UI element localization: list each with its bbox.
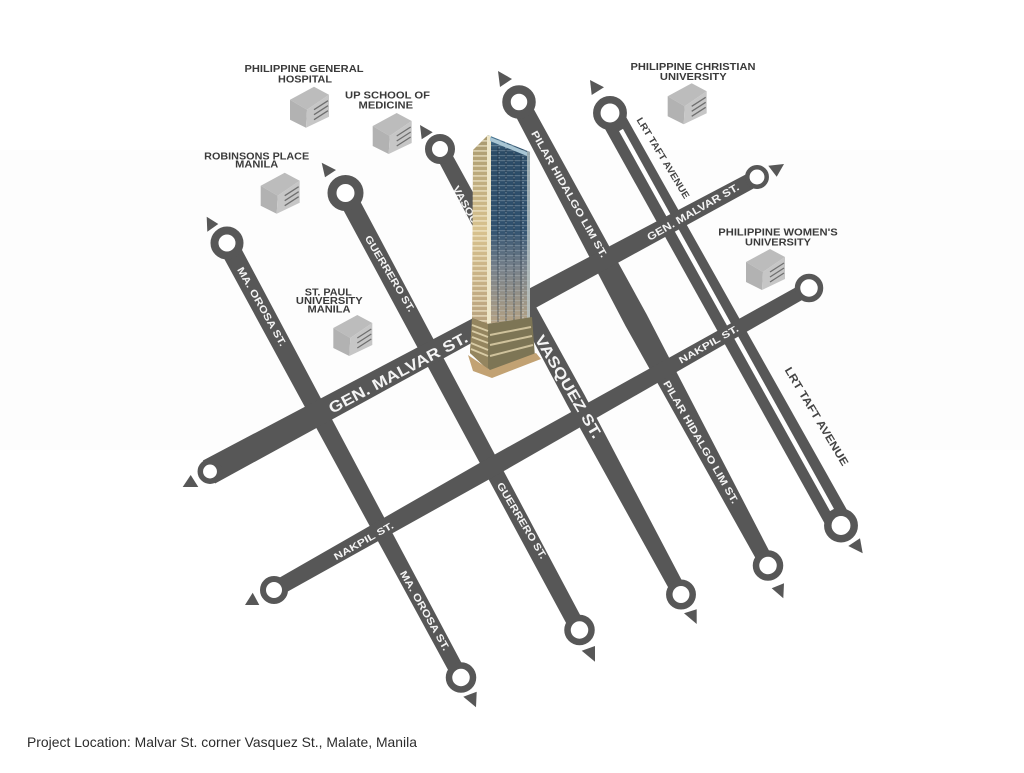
landmark: Philippine General Hospital: PHILIPPINE GENERAL [244, 64, 364, 75]
landmark: Philippine General Hospital [244, 64, 364, 128]
road labels: PILAR HIDALGO LIM ST. [528, 129, 609, 260]
road labels: PILAR HIDALGO LIM ST. [660, 379, 740, 506]
landmark: UP School of Medicine: UP SCHOOL OF [345, 90, 430, 101]
road labels: VASQUEZ ST. [531, 332, 605, 442]
road labels: GEN. MALVAR ST. [645, 181, 741, 244]
road labels: GUERRERO ST. [494, 481, 548, 561]
landmark: Philippine Christian University: PHILIPPINE CHRISTIAN [630, 62, 756, 73]
landmark: Philippine Christian University: UNIVERSITY [660, 72, 727, 83]
road labels: MA. OROSA ST. [397, 569, 451, 653]
landmark: UP School of Medicine: MEDICINE [359, 100, 413, 111]
road labels: GUERRERO ST. [362, 234, 416, 314]
road labels: VASQUEZ ST. [450, 184, 497, 258]
road labels: GEN. MALVAR ST. [326, 330, 471, 417]
road labels: LRT TAFT AVENUE [782, 365, 850, 468]
landmark: Philippine Christian University [630, 62, 756, 124]
road: Nakpil St. [245, 276, 820, 605]
landmark: Robinsons Place Manila: ROBINSONS PLACE [204, 151, 310, 162]
road labels: NAKPIL ST. [332, 520, 396, 563]
landmark: Philippine General Hospital: HOSPITAL [278, 74, 332, 85]
landmark: St. Paul University Manila: UNIVERSITY [296, 296, 363, 307]
landmark: St. Paul University Manila: ST. PAUL [305, 287, 352, 298]
landmark: St. Paul University Manila [296, 287, 372, 356]
road labels: MA. OROSA ST. [234, 266, 288, 349]
landmark: Robinsons Place Manila: MANILA [235, 160, 278, 171]
landmark: Robinsons Place Manila [204, 151, 310, 214]
road labels [234, 116, 850, 653]
landmark: Philippine Women's University: UNIVERSITY [745, 238, 811, 249]
road: Gen. Malvar St. [183, 164, 784, 487]
road: LRT Taft Avenue [590, 80, 863, 553]
landmark: Philippine Women's University [718, 228, 838, 290]
caption: Project Location: Malvar St. corner Vasquez St., Malate, Manila [27, 734, 417, 750]
landmark: St. Paul University Manila: MANILA [308, 304, 350, 315]
road: Ma. Orosa St. [207, 217, 477, 707]
tower [468, 135, 541, 378]
road: Guerrero St. [322, 163, 595, 662]
road: Vasquez St. [420, 125, 697, 624]
road labels: LRT TAFT AVENUE [634, 116, 691, 201]
landmark: Philippine Women's University: PHILIPPINE WOMEN'S [718, 228, 838, 239]
tower podium [468, 317, 541, 378]
landmark: UP School of Medicine [345, 90, 430, 154]
road labels: NAKPIL ST. [677, 324, 741, 366]
road: Pilar Hidalgo Lim St. [498, 71, 784, 598]
